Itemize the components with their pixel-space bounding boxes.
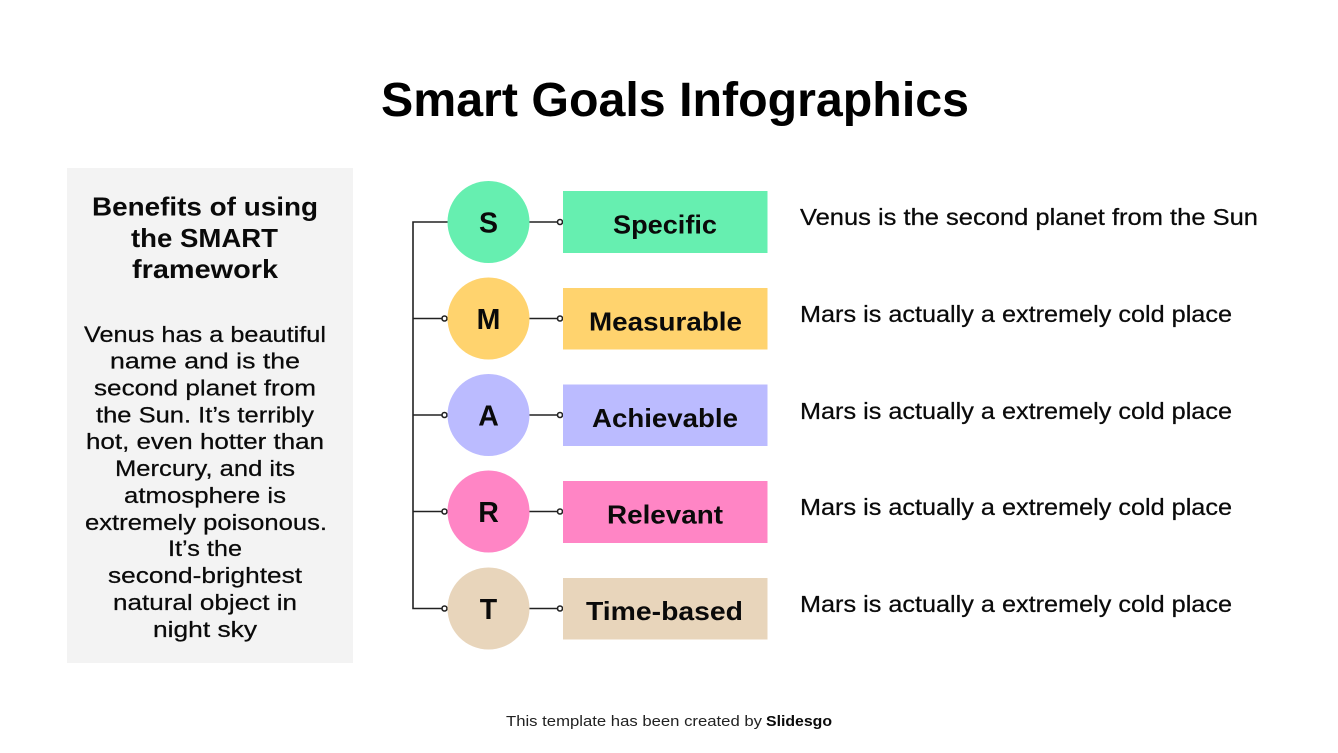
row: Specific: Venus is the second planet from the Sun xyxy=(800,204,1258,230)
footer credit: This template has been created by xyxy=(506,713,763,730)
row: Relevant: Relevant xyxy=(607,500,723,530)
row: Achievable: A xyxy=(478,400,499,432)
panel heading xyxy=(92,192,318,284)
row: Time-based: T xyxy=(480,594,498,626)
panel body text: second planet from xyxy=(94,376,316,400)
row: Measurable: Mars is actually a extremely cold place xyxy=(800,301,1232,327)
panel body text: night sky xyxy=(153,617,258,642)
panel body text: extremely poisonous. xyxy=(85,510,327,535)
row: Relevant: R xyxy=(478,497,499,529)
panel body text: atmosphere is xyxy=(124,483,286,508)
row: Achievable: Mars is actually a extremely cold place xyxy=(800,398,1232,424)
panel heading: framework xyxy=(132,254,279,284)
row: Measurable: M xyxy=(477,304,500,336)
row: Time-based: Time-based xyxy=(586,596,743,626)
row: Achievable xyxy=(448,374,1232,456)
row: Relevant: Mars is actually a extremely cold place xyxy=(800,494,1232,520)
panel body text: hot, even hotter than xyxy=(86,429,324,454)
row: Measurable xyxy=(448,278,1232,360)
panel heading: the SMART xyxy=(131,223,278,253)
panel body text: the Sun. It’s terribly xyxy=(96,402,315,428)
connector tree xyxy=(413,220,562,611)
panel body text: name and is the xyxy=(110,348,300,374)
panel: benefits xyxy=(67,168,353,663)
row: Specific: Specific xyxy=(613,210,717,240)
row: Achievable: Achievable xyxy=(592,403,738,433)
panel body text: Mercury, and its xyxy=(115,456,295,481)
footer credit: Slidesgo xyxy=(766,713,832,730)
panel body text: second-brightest xyxy=(108,563,303,588)
panel body text: natural object in xyxy=(113,590,297,615)
row: Relevant xyxy=(448,470,1232,552)
row: Specific xyxy=(448,181,1258,263)
title: Smart Goals Infographics xyxy=(381,74,969,127)
panel body text xyxy=(84,322,327,642)
panel body text: Venus has a beautiful xyxy=(84,322,326,347)
panel heading: Benefits of using xyxy=(92,192,318,222)
row: Measurable: Measurable xyxy=(589,306,742,336)
row: Time-based: Mars is actually a extremely cold place xyxy=(800,591,1232,617)
panel body text: It’s the xyxy=(168,536,242,561)
row: Specific: S xyxy=(479,208,498,240)
row: Time-based xyxy=(448,568,1232,650)
